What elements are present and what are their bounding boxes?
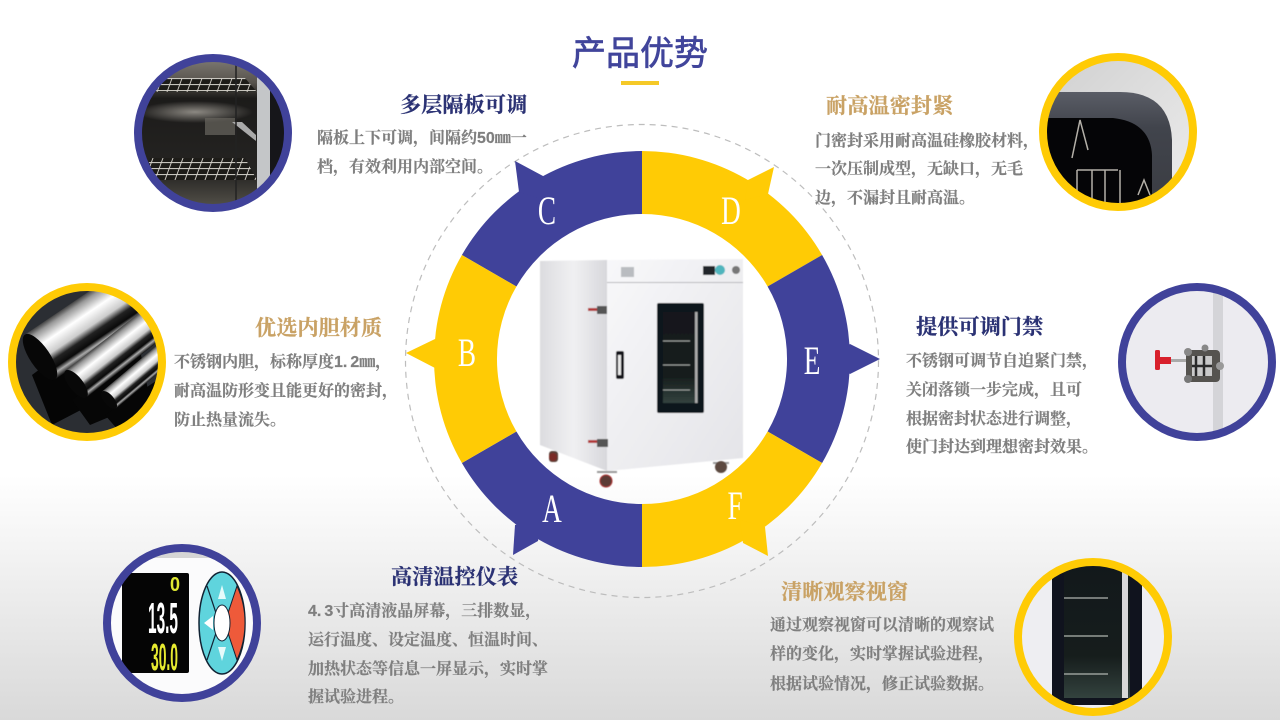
photo: control panel: 13.5 (148, 594, 178, 643)
segment A (462, 432, 642, 567)
feature: 提供可调门禁 (906, 283, 1276, 456)
title underline (621, 81, 659, 85)
segment F (642, 432, 822, 567)
description (815, 131, 1039, 208)
photo: control panel: 0 (170, 574, 180, 596)
description: 档，有效利用内部空间。 (317, 157, 493, 177)
description: 不锈钢内胆，标称厚度1.2㎜， (174, 352, 391, 372)
description: 样的变化，实时掌握试验进程， (770, 644, 994, 664)
description: 通过观察视窗可以清晰的观察试 (770, 615, 994, 634)
photo ring (12, 287, 162, 437)
description: 不锈钢可调节自迫紧门禁， (906, 351, 1098, 371)
feature: 高清温控仪表 (103, 544, 548, 706)
segment F: F (727, 485, 743, 528)
description: 一次压制成型，无缺口，无毛 (815, 159, 1023, 179)
photo ring (1043, 57, 1193, 207)
photo: control panel: 30.0 (151, 637, 178, 679)
segment B (406, 255, 516, 463)
photo ring (1122, 287, 1272, 437)
description: 使门封达到理想密封效果。 (906, 437, 1098, 456)
heading: 清晰观察视窗 (781, 579, 908, 604)
photo: oven shelves (142, 62, 284, 204)
title: 产品优势 (572, 35, 708, 73)
photo: control panel (111, 552, 253, 694)
description: 根据试验情况，修正试验数据。 (770, 674, 994, 694)
segment D (642, 151, 822, 286)
segment C: C (538, 190, 556, 233)
description (317, 128, 527, 177)
ring diagram (406, 151, 880, 567)
feature: 耐高温密封紧 (815, 53, 1197, 211)
photo: door latch (1126, 291, 1268, 433)
description: 4.3寸高清液晶屏幕，三排数显， (308, 601, 541, 621)
description (174, 352, 398, 429)
heading: 耐高温密封紧 (826, 93, 953, 118)
description: 根据密封状态进行调整， (906, 409, 1082, 429)
photo: door gasket (1047, 61, 1189, 203)
feature: 多层隔板可调 (134, 54, 527, 212)
description: 门密封采用耐高温硅橡胶材料， (815, 131, 1039, 151)
description: 运行温度、设定温度、恒温时间、 (308, 630, 548, 649)
description: 握试验进程。 (308, 687, 404, 706)
photo ring (107, 548, 257, 698)
heading: 优选内胆材质 (255, 316, 382, 340)
feature: 清晰观察视窗 (770, 558, 1172, 716)
description: 加热状态等信息一屏显示，实时掌 (308, 659, 548, 679)
segment B: B (458, 332, 476, 375)
heading: 提供可调门禁 (916, 315, 1044, 339)
description: 边，不漏封且耐高温。 (815, 188, 975, 208)
heading: 多层隔板可调 (400, 93, 527, 117)
description: 防止热量流失。 (174, 410, 286, 429)
description (770, 615, 994, 694)
description (308, 601, 548, 706)
feature: 优选内胆材质 (8, 283, 386, 441)
segment D: D (721, 190, 741, 233)
description: 隔板上下可调，间隔约50㎜一 (317, 128, 527, 148)
heading: 高清温控仪表 (391, 564, 518, 589)
photo: observation window (1022, 566, 1164, 708)
photo ring (138, 58, 288, 208)
photo: steel tubes (16, 291, 158, 433)
segment E: E (804, 340, 820, 383)
dashed orbit circle (406, 124, 878, 598)
segment E (768, 255, 880, 463)
product: drying oven (540, 259, 743, 487)
description: 耐高温防形变且能更好的密封， (174, 381, 398, 401)
segment C (462, 151, 642, 286)
description: 关闭落锁一步完成，且可 (906, 380, 1082, 400)
segment A: A (542, 488, 562, 531)
description (906, 351, 1098, 456)
photo ring (1018, 562, 1168, 712)
